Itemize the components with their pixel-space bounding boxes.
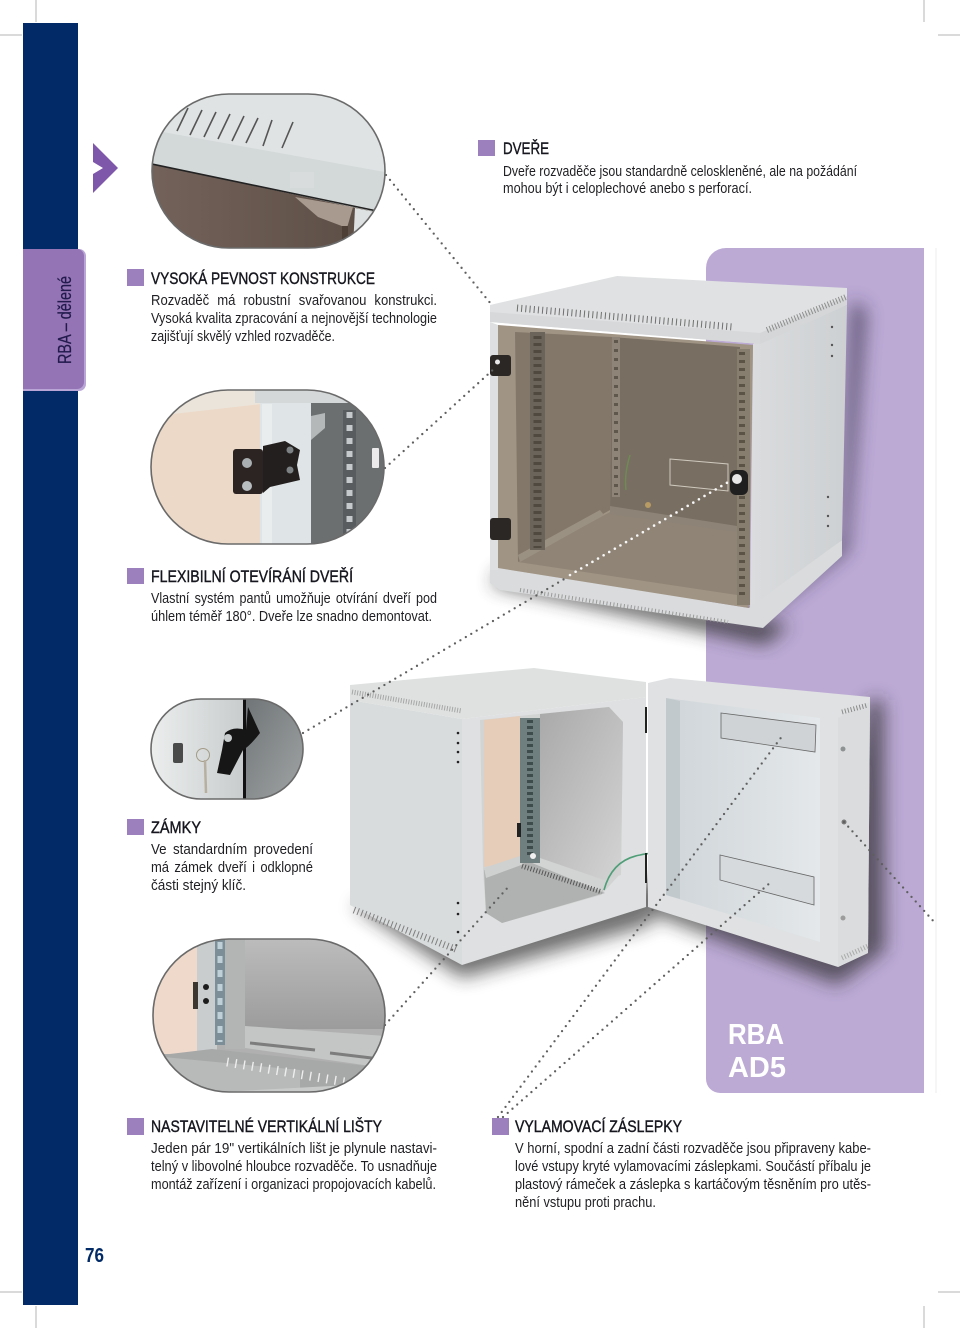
door bbox=[648, 678, 870, 967]
heading: pevnost: VYSOKÁ PEVNOST KONSTRUKCE bbox=[151, 269, 375, 288]
photo pill: top vent detail bbox=[152, 94, 385, 248]
cabinet body left side bbox=[350, 700, 462, 965]
text: záslepky: plastový rámeček a záslepka s kartáčovým těsněním pro utěs- bbox=[515, 1176, 871, 1193]
door knockout plates bbox=[721, 713, 816, 752]
photo: closed cabinet bbox=[490, 276, 866, 645]
text: dveře: mohou být i celoplechové anebo s perforací. bbox=[503, 180, 752, 197]
cabinet top bbox=[350, 668, 646, 719]
square bullet: zámky bbox=[127, 819, 144, 835]
rails bbox=[530, 332, 545, 550]
lavender background panel bbox=[706, 248, 924, 1093]
door stile bbox=[490, 322, 498, 570]
cabinet front frame bbox=[462, 697, 646, 965]
text: zámky bbox=[151, 841, 314, 894]
lock body bbox=[217, 707, 260, 775]
text: dveře bbox=[503, 163, 858, 197]
text: zámky: Ve standardním provedení bbox=[151, 841, 314, 858]
square bullet: otevírání bbox=[127, 568, 144, 584]
dotted callout lines bbox=[303, 175, 936, 1117]
heading: zámky: ZÁMKY bbox=[151, 818, 201, 837]
cabinet front bottom band bbox=[490, 540, 842, 628]
cabinet right side bbox=[750, 305, 847, 612]
text: pevnost: Vysoká kvalita zpracování a nejnovější technologie bbox=[151, 310, 437, 327]
section tab bbox=[23, 249, 86, 391]
cabinet opening bbox=[480, 707, 623, 923]
photo pill: lock detail bbox=[151, 699, 303, 799]
square bullet: záslepky bbox=[492, 1118, 509, 1135]
square bullet: lišty bbox=[127, 1118, 144, 1135]
glass door bbox=[498, 325, 753, 608]
door lock bbox=[730, 470, 748, 495]
text: lišty: montáž zařízení i organizaci propojovacích kabelů. bbox=[151, 1176, 436, 1193]
page number: 76 bbox=[85, 1245, 104, 1267]
text: lišty bbox=[151, 1140, 437, 1193]
navy side bar bbox=[23, 23, 78, 1305]
text: pevnost: Rozvaděč má robustní svařovanou konstrukci. bbox=[151, 292, 437, 309]
product name: RBA bbox=[728, 1019, 784, 1051]
text: záslepky: nění vstupu proti prachu. bbox=[515, 1194, 656, 1211]
text: lišty: Jeden pár 19" vertikálních lišt je plynule nastavi- bbox=[151, 1140, 437, 1157]
heading: dveře: DVEŘE bbox=[503, 139, 549, 158]
upper hinge bbox=[490, 355, 511, 376]
square bullet: pevnost bbox=[127, 269, 144, 286]
text: otevírání: Vlastní systém pantů umožňuje otvírání dveří pod bbox=[151, 590, 437, 607]
text: pevnost: zajišťují skvělý vzhled rozvaděče. bbox=[151, 328, 335, 345]
text: záslepky bbox=[515, 1140, 871, 1211]
lower hinge bbox=[490, 518, 511, 540]
text: záslepky: lové vstupy kryté vylamovacími záslepkami. Součástí příbalu je bbox=[515, 1158, 871, 1175]
text: pevnost bbox=[151, 292, 437, 345]
cabinet top bbox=[490, 276, 847, 344]
text: lišty: telný v libovolné hloubce rozvaděče. To usnadňuje bbox=[151, 1158, 437, 1175]
hinge plate bbox=[233, 449, 263, 494]
heading: lišty: NASTAVITELNÉ VERTIKÁLNÍ LIŠTY bbox=[151, 1117, 382, 1136]
text: dveře: Dveře rozvaděče jsou standardně celoskleněné, ale na požádání bbox=[503, 163, 858, 180]
photo pill: hinge detail bbox=[151, 390, 384, 544]
chevron arrow bbox=[93, 143, 118, 193]
cabinet rail bbox=[517, 718, 540, 863]
heading: záslepky: VYLAMOVACÍ ZÁSLEPKY bbox=[515, 1117, 682, 1136]
text: záslepky: V horní, spodní a zadní části rozvaděče jsou připraveny kabe- bbox=[515, 1140, 871, 1157]
side fixing dots bbox=[827, 326, 833, 527]
section tab label: RBA – dělené bbox=[55, 276, 75, 364]
photo: open cabinet bbox=[350, 668, 885, 985]
photo pill: vertical rail detail bbox=[153, 939, 385, 1092]
text: zámky: části stejný klíč. bbox=[151, 877, 246, 894]
text: zámky: má zámek dveří i odklopné bbox=[151, 859, 313, 876]
square bullet: dveře bbox=[478, 140, 495, 156]
product name bbox=[728, 1019, 786, 1084]
text: otevírání: úhlem téměř 180°. Dveře lze snadno demontovat. bbox=[151, 608, 432, 625]
product name: AD5 bbox=[728, 1052, 786, 1084]
text: otevírání bbox=[151, 590, 437, 625]
heading: otevírání: FLEXIBILNÍ OTEVÍRÁNÍ DVEŘÍ bbox=[151, 567, 353, 586]
